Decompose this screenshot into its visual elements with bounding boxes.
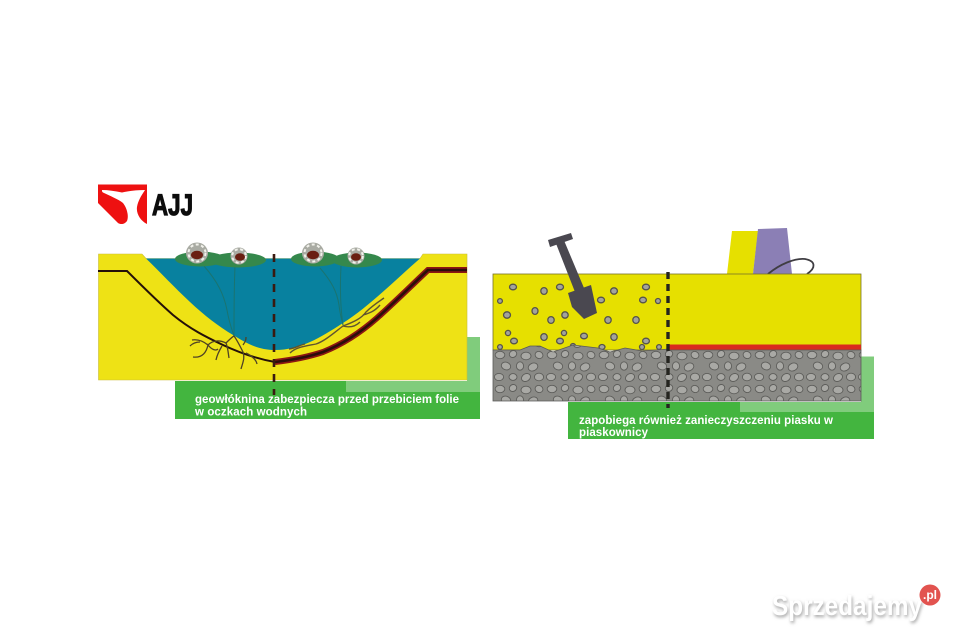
red geotextile strip [669, 344, 861, 350]
caption text: w oczkach wodnych [194, 406, 307, 418]
sand layer [493, 274, 861, 350]
lily pads [175, 252, 382, 268]
caption text: geowłóknina zabezpiecza przed przebiciem folie [195, 394, 459, 406]
yellow block [727, 231, 758, 274]
water [146, 258, 420, 350]
water lily flowers [186, 242, 364, 264]
panel: sandbox cross-section [493, 228, 861, 408]
liner right: thick red [275, 270, 467, 362]
roots left [190, 336, 257, 369]
liner left: thin black [98, 271, 275, 362]
panel: pond cross-section [98, 242, 467, 395]
caption accent [740, 356, 874, 412]
roots right [289, 298, 384, 353]
icon: red logo mark [98, 184, 147, 224]
watermark badge [920, 584, 940, 606]
caption text: zapobiega również zanieczyszczeniu piasku w [579, 415, 833, 427]
caption accent [346, 337, 480, 392]
panel: pond caption [175, 337, 480, 419]
watermark badge text: .pl [923, 588, 937, 602]
gravel left in sand [498, 284, 661, 350]
divider [666, 272, 670, 408]
caption background [175, 381, 480, 419]
caption background [568, 402, 874, 439]
logo wordmark: AJJ [152, 189, 193, 222]
icon: shovel [548, 233, 597, 319]
gravel layer [493, 345, 861, 401]
purple block [753, 228, 792, 274]
divider [273, 254, 275, 395]
stems [204, 266, 343, 336]
logo: AJJ [98, 184, 193, 224]
caption text: piaskownicy [579, 427, 649, 439]
panel: sandbox caption [568, 356, 874, 439]
soil [98, 254, 467, 380]
watermark text: Sprzedajemy [772, 590, 922, 621]
cable [768, 259, 814, 274]
watermark: Sprzedajemy.pl [772, 584, 940, 621]
